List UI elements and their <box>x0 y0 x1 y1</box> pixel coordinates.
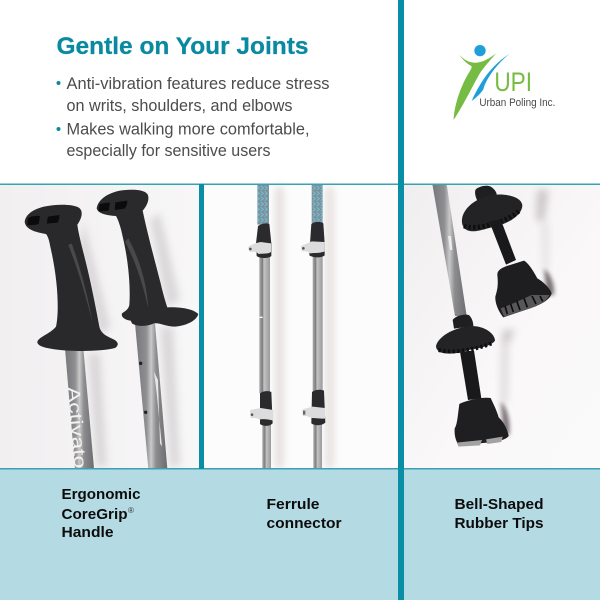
left handle grip <box>25 205 118 351</box>
caption: tips <box>454 496 544 532</box>
logo company name: Urban Poling Inc. <box>479 97 555 109</box>
logo head <box>474 45 486 56</box>
caption: tips: Bell-Shaped <box>454 496 544 513</box>
left pole upper connector <box>248 223 271 258</box>
logo blue swoosh <box>472 54 510 101</box>
bullet 2: Makes walking more comfortable, <box>66 120 310 138</box>
caption: handle: ® <box>128 506 134 515</box>
long pole <box>432 184 467 316</box>
upper tip: neck <box>475 186 497 201</box>
logo green figure <box>454 53 496 120</box>
tip shadows <box>501 190 554 435</box>
caption: ferrule: connector <box>266 515 342 532</box>
lower tip: rubber cup <box>455 398 509 447</box>
upper tip: basket <box>462 195 522 231</box>
caption: handle <box>62 486 140 541</box>
title: Gentle on Your Joints <box>56 33 308 60</box>
handle shadows <box>80 213 180 467</box>
logo: Urban Poling Inc. <box>454 45 555 120</box>
caption: tips: Rubber Tips <box>454 515 544 532</box>
caption: ferrule: Ferrule <box>266 496 320 513</box>
pole shadows <box>275 187 333 468</box>
left pole lower connector <box>250 391 273 426</box>
caption: ferrule <box>266 496 342 532</box>
lower tip: neck <box>453 315 473 329</box>
left pole <box>64 348 94 469</box>
right pole lower connector <box>302 390 325 425</box>
caption: handle: CoreGrip <box>62 506 128 523</box>
left pole: Activato <box>64 386 91 469</box>
logo UPI wordmark: UPI <box>494 67 532 97</box>
lower tip: basket <box>436 326 495 354</box>
upper tip: stem <box>489 219 516 265</box>
horizontal rule above photos <box>0 184 600 185</box>
bullet 1: Anti-vibration features reduce stress <box>66 74 330 93</box>
panel: ferrule photo <box>204 184 399 469</box>
bullet 2 <box>56 120 310 160</box>
right pole upper connector <box>301 222 325 257</box>
bullet 1 <box>56 74 330 115</box>
divider: main vertical <box>398 0 404 600</box>
panel: rubber tips photo <box>404 184 600 469</box>
right pole <box>312 184 323 468</box>
caption: handle: Ergonomic <box>62 486 140 503</box>
right pole <box>135 323 167 468</box>
divider: left photo <box>199 184 204 469</box>
left pole <box>257 184 271 468</box>
caption band <box>0 468 600 600</box>
bullet list <box>56 74 330 160</box>
upper tip: rubber cup <box>495 261 552 317</box>
bullet 1: on writs, shoulders, and elbows <box>66 96 292 115</box>
bullet 2: especially for sensitive users <box>66 141 270 160</box>
right handle grip <box>97 190 198 327</box>
caption: handle: Handle <box>62 524 114 541</box>
panel: handle photo <box>0 185 199 469</box>
lower tip: stem <box>460 351 481 400</box>
